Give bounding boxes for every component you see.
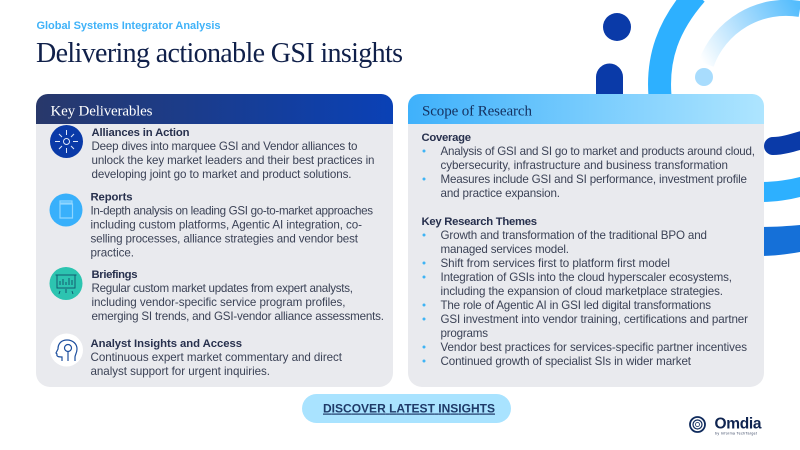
item: analyst insights and access	[90, 338, 343, 378]
key research themes section: Integration of GSIs into the cloud hyperscaler ecosystems,	[440, 271, 732, 284]
item: analyst insights and access: analyst support for urgent inquiries.	[90, 365, 270, 378]
item: briefings: Regular custom market updates from expert analysts,	[92, 282, 353, 295]
eyebrow heading: Global Systems Integrator Analysis	[36, 20, 220, 32]
icon: analyst head	[50, 334, 83, 366]
coverage section: Analysis of GSI and SI go to market and products around cloud,	[440, 145, 755, 158]
key research themes section: Key Research Themes	[422, 216, 537, 228]
coverage section: Coverage	[422, 132, 471, 144]
call to action button: DISCOVER LATEST INSIGHTS	[323, 402, 495, 416]
item: reports: Reports	[90, 192, 132, 204]
decorative arcs and shapes	[596, 0, 800, 256]
item: analyst insights and access: Analyst Insights and Access	[90, 338, 242, 350]
key research themes section: Growth and transformation of the traditional BPO and	[440, 229, 707, 242]
item: reports: including custom platforms, Agentic AI integration, co-	[90, 218, 362, 232]
panel: key deliverables	[36, 94, 393, 387]
key research themes section: Vendor best practices for services-specific partner incentives	[440, 341, 747, 354]
item: alliances in action: unlock the key market leaders and their best practices in	[92, 154, 374, 167]
key research themes section: including the expansion of cloud marketplace strategies.	[440, 285, 723, 298]
item: analyst insights and access: Continuous expert market commentary and direct	[90, 351, 343, 364]
call to action button	[302, 394, 511, 423]
item: briefings	[92, 269, 384, 323]
key research themes section: GSI investment into vendor training, certifications and partner	[440, 313, 748, 326]
panel: scope of research	[408, 94, 764, 387]
item: briefings: Briefings	[92, 269, 138, 281]
item: reports: In-depth analysis on leading GSI go-to-market approaches	[90, 204, 373, 218]
icon: briefing chart	[50, 267, 82, 300]
coverage section: cybersecurity, infrastructure and business transformation	[440, 159, 728, 172]
coverage section	[422, 132, 755, 200]
item: alliances in action	[92, 127, 374, 181]
key research themes section	[422, 216, 748, 368]
item: briefings: including vendor-specific service program profiles,	[92, 296, 346, 309]
title: Delivering actionable GSI insights	[36, 38, 403, 69]
icon: target	[50, 125, 83, 158]
panel header: key deliverables	[36, 94, 393, 124]
icon: report	[50, 194, 82, 226]
item: reports	[90, 192, 373, 260]
item: reports: selling processes, alliance strategies and vendor best	[90, 232, 359, 246]
coverage section: and practice expansion.	[440, 187, 560, 200]
logo: Omdia: by Informa TechTarget	[715, 432, 757, 436]
key research themes section: The role of Agentic AI in GSI led digital transformations	[440, 299, 711, 312]
key research themes section: managed services model.	[440, 243, 569, 256]
panel header: scope of research: Scope of Research	[422, 104, 532, 120]
key research themes section: Continued growth of specialist SIs in wider market	[440, 355, 692, 368]
item: briefings: emerging SI trends, and GSI-vendor alliance assessments.	[92, 310, 384, 323]
panel header: key deliverables: Key Deliverables	[50, 104, 153, 120]
item: alliances in action: developing joint go to market and product solutions.	[92, 168, 352, 181]
coverage section: Measures include GSI and SI performance, investment profile	[440, 173, 747, 186]
panel header: scope of research	[408, 94, 764, 124]
key research themes section: Shift from services first to platform first model	[440, 257, 670, 270]
logo: Omdia	[690, 416, 762, 436]
item: reports: practice.	[90, 246, 134, 260]
item: alliances in action: Deep dives into marquee GSI and Vendor alliances to	[92, 140, 358, 153]
logo: Omdia: Omdia	[714, 416, 762, 432]
key research themes section: programs	[440, 327, 488, 340]
item: alliances in action: Alliances in Action	[92, 127, 190, 139]
